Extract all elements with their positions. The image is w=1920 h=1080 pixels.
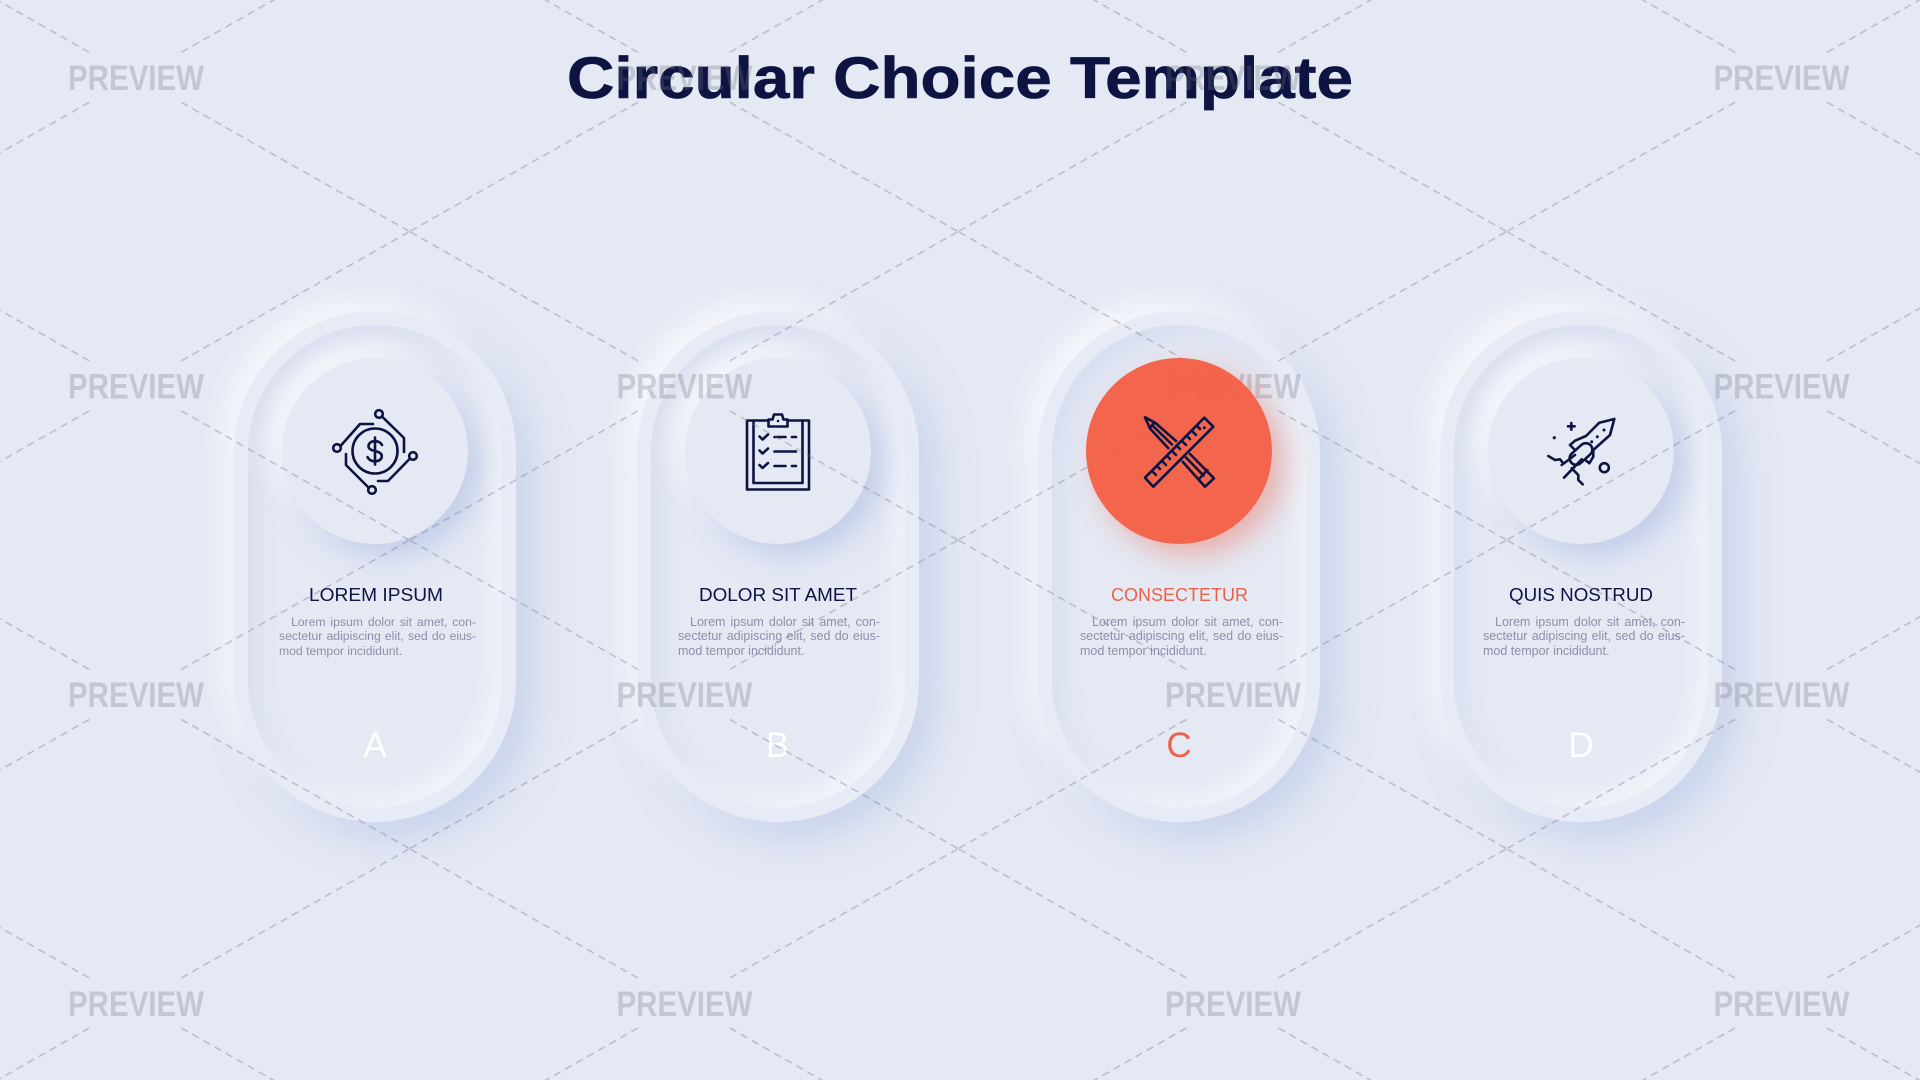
watermark overlay: PREVIEW text and dashed lattice: PREVIEW [1714,59,1850,98]
heading D: QUIS NOSTRUD [1509,584,1653,605]
text block C: sectetur adipiscing elit, sed do eius- [1080,629,1283,643]
watermark overlay: PREVIEW text and dashed lattice: PREVIEW [1714,676,1850,715]
panel: option A [234,311,516,822]
text block B: Lorem ipsum dolor sit amet, con- [690,614,880,628]
watermark overlay: PREVIEW text and dashed lattice: PREVIEW [1165,368,1301,407]
watermark overlay: PREVIEW text and dashed lattice: PREVIEW [68,676,204,715]
watermark overlay: PREVIEW text and dashed lattice: PREVIEW [616,368,752,407]
watermark overlay: PREVIEW text and dashed lattice: PREVIEW [68,59,204,98]
inset well A [248,325,502,808]
text block D: mod tempor incididunt. [1483,644,1609,658]
text block B: mod tempor incididunt. [678,644,804,658]
letter B: B [766,726,789,764]
watermark overlay: PREVIEW text and dashed lattice: PREVIEW [1714,368,1850,407]
icon disc B [684,358,870,544]
icon: dollar circuit [332,408,418,496]
text block D: sectetur adipiscing elit, sed do eius- [1483,629,1685,643]
letter D: D [1568,726,1594,764]
icon disc D [1488,358,1674,544]
icon: crossed pencil and ruler [1144,416,1216,488]
text block A: mod tempor incididunt. [279,644,402,658]
panel: option B [636,311,918,822]
watermark overlay: PREVIEW text and dashed lattice: PREVIEW [616,676,752,715]
text block C: Lorem ipsum dolor sit amet, con- [1092,614,1283,628]
text block D [1483,614,1685,658]
text block C: mod tempor incididunt. [1080,644,1206,658]
watermark overlay: PREVIEW text and dashed lattice: PREVIEW [616,59,752,98]
watermark overlay: PREVIEW text and dashed lattice: PREVIEW [1165,985,1301,1024]
text block A: Lorem ipsum dolor sit amet, con- [291,614,476,628]
watermark overlay: PREVIEW text and dashed lattice: PREVIEW [616,985,752,1024]
watermark overlay: PREVIEW text and dashed lattice: PREVIEW [1714,985,1850,1024]
inset well B [650,325,904,808]
letter A: A [363,726,387,764]
text block C [1080,614,1283,658]
text block B: sectetur adipiscing elit, sed do eius- [678,629,880,643]
panel: option C (highlighted) [1038,311,1320,822]
watermark overlay: PREVIEW text and dashed lattice: PREVIEW [68,985,204,1024]
icon disc A [282,358,468,544]
watermark overlay: PREVIEW text and dashed lattice: PREVIEW [68,368,204,407]
watermark overlay: PREVIEW text and dashed lattice: PREVIEW [1165,676,1301,715]
heading B: DOLOR SIT AMET [699,584,857,605]
inset well D [1454,325,1708,808]
heading C: CONSECTETUR [1111,584,1248,605]
text block B [678,614,880,658]
icon: rocket [1546,418,1616,486]
text block A: sectetur adipiscing elit, sed do eius- [279,629,476,643]
text block D: Lorem ipsum dolor sit amet, con- [1495,614,1685,628]
inset well C [1052,325,1306,808]
watermark overlay: PREVIEW text and dashed lattice: PREVIEW [1165,59,1301,98]
panel: option D [1440,311,1722,822]
icon: clipboard checklist [746,413,810,491]
icon disc C, orange [1086,358,1272,544]
heading A: LOREM IPSUM [308,584,442,605]
text block A [279,614,476,658]
title: Circular Choice Template [567,46,1353,111]
letter C: C [1166,726,1192,764]
